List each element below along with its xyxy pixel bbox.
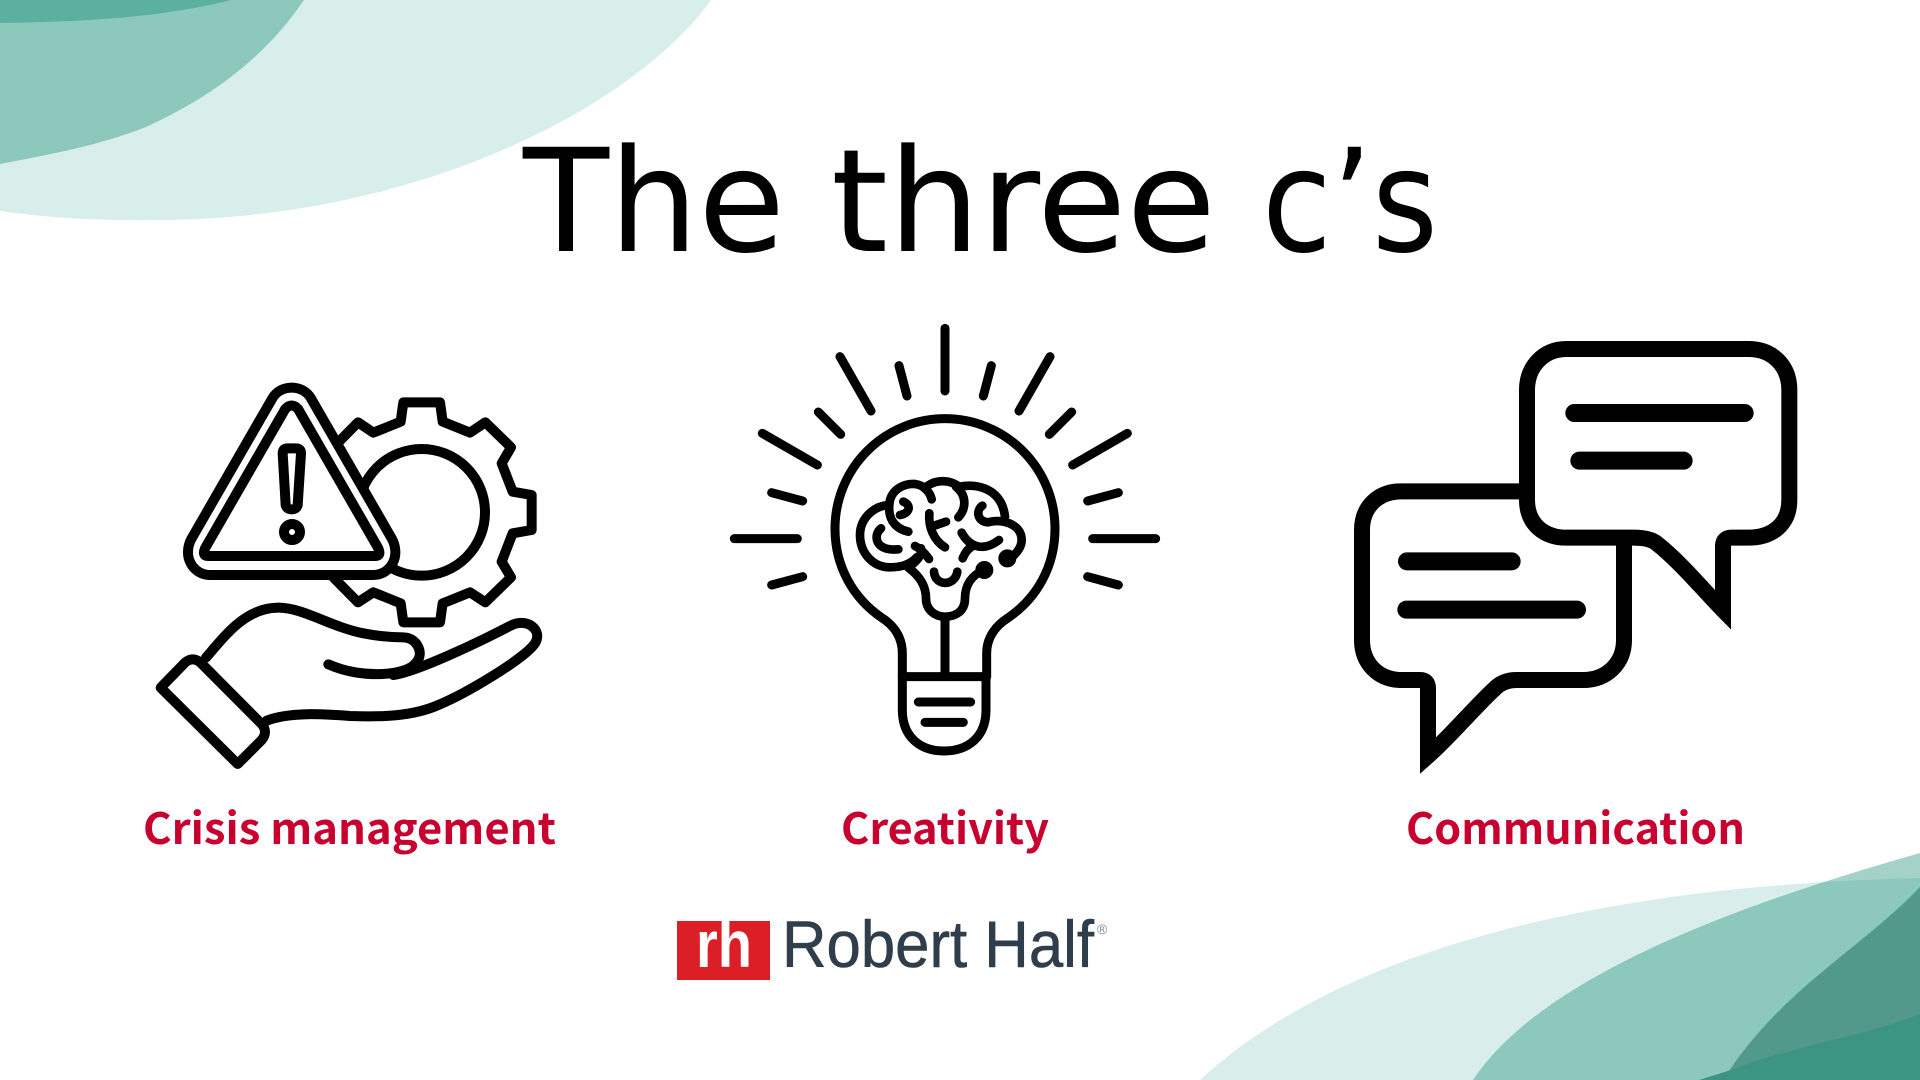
title: The — [522, 118, 785, 285]
bubble text lines — [1406, 413, 1745, 610]
icon: light bulb with brain — [734, 328, 1156, 751]
light rays — [734, 328, 1156, 585]
icon: speech bubbles — [1362, 349, 1789, 756]
title — [522, 118, 1438, 285]
hand — [161, 608, 537, 764]
label: creativity: Creativity — [841, 795, 1049, 857]
warning triangle — [188, 388, 395, 575]
logo mark: rh — [696, 907, 752, 981]
upper right bubble — [1527, 349, 1789, 610]
logo mark — [677, 921, 770, 980]
title: three — [831, 118, 1216, 285]
label: communication: Communication — [1406, 795, 1745, 857]
decorative corner waves: bottom right — [1200, 853, 1920, 1080]
decorative corner waves: top left — [0, 0, 711, 220]
gear — [312, 402, 532, 622]
title: c’s — [1262, 118, 1438, 285]
label: crisis management: Crisis management — [143, 795, 556, 857]
bulb glass and base — [835, 419, 1055, 751]
lower left bubble — [1362, 491, 1624, 756]
brain — [860, 481, 1022, 617]
registered mark: ® — [1097, 921, 1108, 937]
logo: Robert Half — [677, 918, 1108, 980]
logo wordmark: Robert Half — [782, 907, 1095, 981]
icon: hand holding warning triangle and gear — [161, 388, 537, 764]
